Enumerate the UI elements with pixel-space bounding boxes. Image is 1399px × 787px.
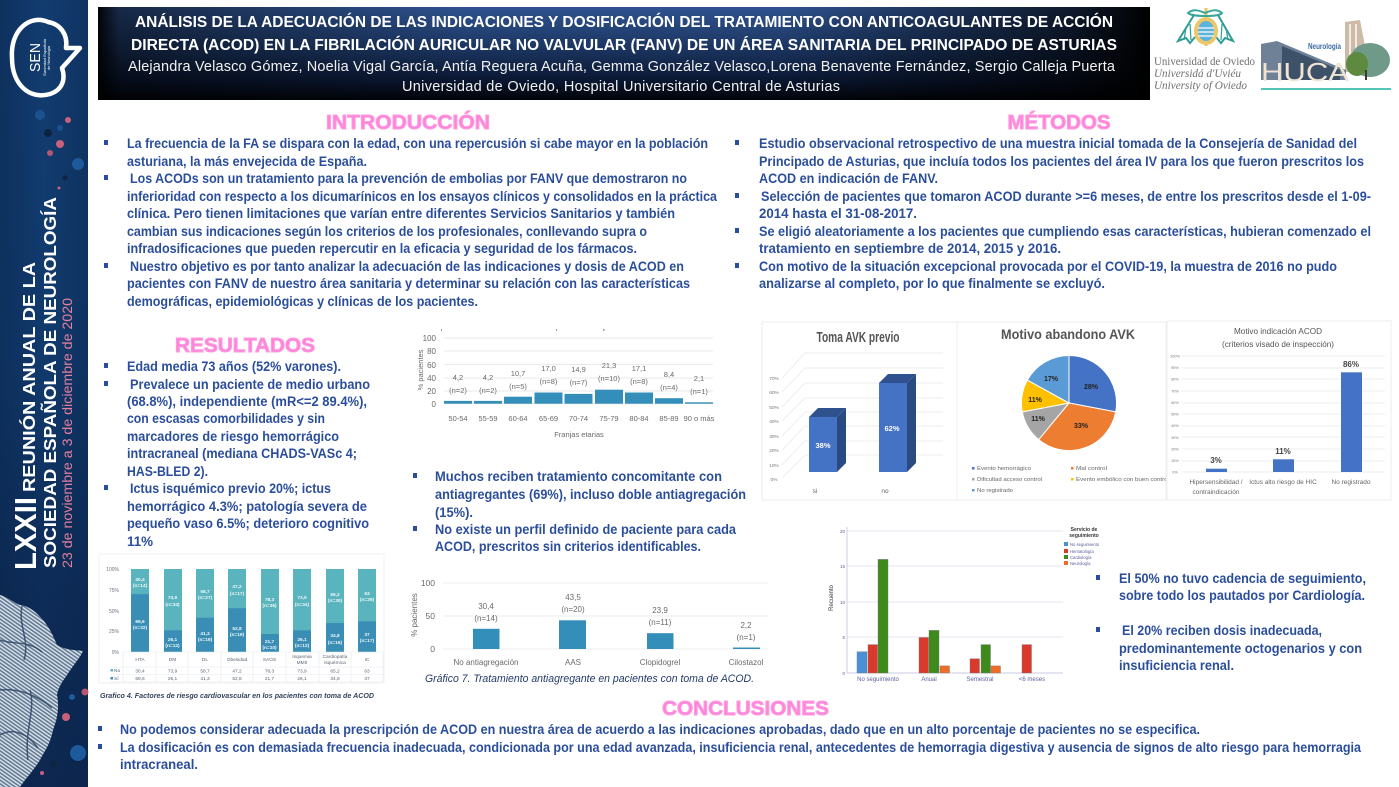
bar value labels: (n=14) bbox=[133, 583, 148, 589]
bar value labels: (n=12) bbox=[295, 643, 310, 649]
logo: HUCA Neurología: HUCA bbox=[1261, 57, 1350, 87]
bar value labels: (n=30) bbox=[328, 598, 343, 604]
sidebar banner bbox=[0, 0, 88, 787]
text block: seguimiento y dosis: predominantemente octogenarios y con bbox=[1119, 641, 1362, 656]
x axis labels: 90 o más bbox=[684, 414, 715, 423]
illustration: brain bbox=[0, 595, 83, 787]
y axis labels: 100% bbox=[106, 567, 120, 573]
value labels bbox=[474, 593, 756, 642]
chart: servicio de seguimiento: 20 bbox=[840, 529, 845, 534]
logo: Universidad de Oviedo: Universidad de Oviedo bbox=[1154, 56, 1255, 68]
sidebar title: LXXII bbox=[8, 497, 43, 570]
chart: toma AVK previo: 0% bbox=[771, 477, 778, 483]
chart: toma AVK previo: 50% bbox=[769, 405, 780, 411]
chart: motivo indicación ACOD: 50% bbox=[1171, 412, 1179, 416]
chart: motivo indicación ACOD: 100% bbox=[1170, 354, 1180, 358]
heading: resultados: RESULTADOS bbox=[175, 335, 315, 357]
bar value labels: 65,2 bbox=[330, 592, 340, 598]
chart: motivo indicación ACOD: 30% bbox=[1171, 436, 1179, 440]
y axis labels: 40 bbox=[427, 374, 437, 383]
text block: resultados: 11% bbox=[127, 534, 153, 549]
value labels: (n=4) bbox=[660, 383, 678, 392]
text block: introducción: inferioridad con respecto a los dicumarínicos en los ensayos clínicos y consolidados en la práctica bbox=[127, 189, 717, 204]
text block: resultados bbox=[104, 359, 370, 549]
chart: motivo abandono AVK: 33% bbox=[1074, 423, 1089, 430]
chart: motivo indicación ACOD: 80% bbox=[1171, 378, 1179, 382]
value labels: 10,7 bbox=[511, 369, 525, 378]
icon: crest bbox=[1178, 8, 1233, 46]
y axis labels bbox=[423, 334, 437, 409]
text block: métodos: 2014 hasta el 31-08-2017. bbox=[759, 206, 917, 221]
bar value labels: 47,2 bbox=[232, 584, 242, 590]
text block: seguimiento y dosis bbox=[1096, 571, 1366, 673]
chart: motivo indicación ACOD: 20% bbox=[1171, 448, 1179, 452]
chart: factores de riesgo cardiovascular bbox=[99, 554, 384, 700]
chart title: (criterios visado de inspección) bbox=[1222, 340, 1334, 349]
data table: HTA bbox=[135, 657, 145, 663]
logo: HUCA Neurología: Neurología bbox=[1308, 41, 1341, 51]
data table bbox=[110, 652, 383, 682]
bar value labels: (n=10) bbox=[262, 645, 277, 651]
chart: motivo indicación ACOD: No registrado bbox=[1331, 479, 1371, 486]
chart: toma AVK previo: si bbox=[813, 488, 817, 495]
panel: conclusiones bbox=[98, 698, 1361, 772]
chart: tratamiento antiagregante: 50 bbox=[426, 611, 435, 621]
value labels: (n=8) bbox=[630, 377, 648, 386]
data table: 69,6 bbox=[135, 676, 145, 682]
chart: motivo indicación ACOD: 60% bbox=[1171, 401, 1179, 405]
data table: 63 bbox=[364, 668, 370, 674]
text block: métodos: Estudio observacional retrospectivo de una muestra inicial tomada de la Consejería de Sanidad del bbox=[759, 136, 1357, 151]
bar value labels: (n=19) bbox=[198, 637, 213, 643]
y axis labels: 0% bbox=[112, 650, 120, 656]
data table: 58,7 bbox=[200, 668, 210, 674]
pie bbox=[1021, 355, 1117, 451]
data table: 34,8 bbox=[330, 676, 340, 682]
chart title: Motivo abandono AVK bbox=[1001, 326, 1135, 342]
text block: seguimiento y dosis: El 20% reciben dosis inadecuada, bbox=[1122, 623, 1322, 638]
text block: antiagregación: No existe un perfil definido de paciente para cada bbox=[435, 522, 736, 537]
value labels: (n=2) bbox=[449, 386, 467, 395]
bar value labels: 73,9 bbox=[297, 595, 307, 601]
value labels: (n=5) bbox=[509, 382, 527, 391]
chart: motivo indicación ACOD: 90% bbox=[1171, 366, 1179, 370]
value labels: (n=20) bbox=[561, 605, 585, 614]
icon: SEN logo bbox=[12, 20, 80, 95]
legend: Neurología bbox=[1070, 561, 1091, 566]
data table: 73,9 bbox=[297, 668, 307, 674]
chart: motivo indicación ACOD: 10% bbox=[1171, 459, 1179, 463]
icon: SEN logo: de Neurología bbox=[47, 46, 51, 70]
3D bars bbox=[809, 374, 916, 472]
chart: franjas etarias bbox=[416, 330, 715, 439]
panel: introducción bbox=[104, 110, 717, 309]
text block: conclusiones bbox=[98, 722, 1361, 772]
text block: introducción bbox=[104, 136, 717, 309]
data table: DM bbox=[169, 657, 176, 663]
y axis labels: 20 bbox=[427, 387, 437, 396]
bars bbox=[473, 620, 760, 649]
chart: motivo indicación ACOD bbox=[1167, 321, 1391, 500]
logo: Universidad de Oviedo: Universidá d'Uviéu bbox=[1154, 68, 1241, 80]
chart: motivo abandono AVK: 17% bbox=[1044, 376, 1059, 383]
chart: toma AVK previo: 20% bbox=[769, 448, 780, 454]
value labels: 8,4 bbox=[664, 370, 674, 379]
logo: Universidad de Oviedo bbox=[1154, 8, 1255, 92]
data table: 21,7 bbox=[265, 676, 274, 682]
text block: seguimiento y dosis: insuficiencia renal. bbox=[1119, 658, 1234, 673]
text block: seguimiento y dosis: sobre todo los pautados por Cardiología. bbox=[1119, 588, 1365, 603]
bar value labels: (n=17) bbox=[230, 591, 245, 597]
x axis labels: 60-64 bbox=[508, 414, 528, 423]
icon: SEN logo: Sociedad Española bbox=[43, 39, 47, 76]
bar value labels: 73,9 bbox=[168, 595, 177, 601]
bar value labels: (n=34) bbox=[295, 602, 310, 608]
chart: motivo abandono AVK: 28% bbox=[1084, 384, 1099, 391]
value labels: 21,3 bbox=[602, 361, 616, 370]
data table: 30,4 bbox=[135, 668, 145, 674]
chart: toma AVK previo: 38% bbox=[815, 441, 831, 450]
text block: resultados: Edad media 73 años (52% varones). bbox=[127, 359, 341, 374]
value labels: (n=1) bbox=[737, 633, 756, 642]
chart: toma AVK previo: 62% bbox=[884, 424, 900, 433]
data table: 73,9 bbox=[168, 668, 177, 674]
legend: Cardiología bbox=[1070, 555, 1092, 560]
value labels: (n=10) bbox=[598, 374, 620, 383]
bar value labels: (n=16) bbox=[328, 640, 343, 646]
y axis labels: 25% bbox=[109, 629, 120, 635]
value labels: 43,5 bbox=[565, 593, 581, 602]
data table: SAOS bbox=[263, 657, 276, 663]
text block: métodos: analizarse al completo, por lo que finalmente se excluyó. bbox=[759, 276, 1105, 291]
chart: servicio de seguimiento: No seguimiento bbox=[857, 677, 900, 683]
chart caption: Gráfico 7. Tratamiento antiagregante en pacientes con toma de ACOD. bbox=[425, 673, 754, 685]
chart: motivo indicación ACOD: 11% bbox=[1275, 447, 1291, 456]
text block: introducción: Los ACODs son un tratamiento para la prevención de embolias por FANV que demostraron no bbox=[130, 171, 687, 186]
chart: tratamiento antiagregante bbox=[410, 578, 768, 685]
value labels: (n=2) bbox=[479, 386, 497, 395]
text block: métodos: Selección de pacientes que tomaron ACOD durante >=6 meses, de entre los prescritos desde el 1-09- bbox=[761, 189, 1371, 204]
chart: motivo indicación ACOD: Ictus alto riesgo de HIC bbox=[1249, 479, 1317, 486]
x axis labels: 75-79 bbox=[599, 414, 619, 423]
bar value labels: 52,8 bbox=[232, 626, 242, 632]
y axis labels: 60 bbox=[427, 361, 437, 370]
data table: Sí bbox=[114, 676, 119, 682]
bar value labels: 41,3 bbox=[200, 631, 210, 637]
text block: introducción: cambian sus indicaciones según los criterios de los profesionales, conllevando supra o bbox=[127, 224, 647, 239]
text block: resultados: pequeño vaso 6.5%; deterioro cognitivo bbox=[127, 516, 369, 531]
y axis labels: 100 bbox=[423, 334, 437, 343]
header banner bbox=[98, 7, 1150, 100]
value labels: (n=8) bbox=[540, 377, 558, 386]
value labels: 30,4 bbox=[478, 602, 494, 611]
sidebar title: REUNIÓN ANUAL DE LA bbox=[18, 262, 39, 492]
legend: No registrado bbox=[977, 488, 1013, 494]
value labels: 2,2 bbox=[740, 621, 752, 630]
data table: 26,1 bbox=[168, 676, 177, 682]
text block: introducción: clínica. Pero tienen limitaciones que varían entre diferentes Servicios Sanitarios y también bbox=[127, 206, 675, 221]
chart: servicio de seguimiento: 15 bbox=[840, 564, 845, 569]
sidebar title: SOCIEDAD ESPAÑOLA DE NEUROLOGÍA bbox=[39, 197, 60, 568]
legend: No seguimiento bbox=[1070, 542, 1100, 547]
bar value labels: 26,1 bbox=[297, 637, 307, 643]
chart: toma AVK previo: 30% bbox=[769, 434, 780, 440]
text block: conclusiones: intracraneal. bbox=[120, 757, 198, 772]
value labels: (n=11) bbox=[649, 618, 672, 627]
legend: Servicio de bbox=[1071, 527, 1098, 533]
y axis labels: 0 bbox=[432, 400, 437, 409]
x axis labels bbox=[448, 414, 715, 423]
value labels: 2,1 bbox=[694, 374, 704, 383]
bars bbox=[1206, 372, 1362, 472]
value labels: 23,9 bbox=[652, 606, 668, 615]
chart: motivo abandono AVK bbox=[957, 322, 1169, 500]
text block: conclusiones: No podemos considerar adecuada la prescripción de ACOD en nuestra área de acuerdo a las indicaciones aprobadas, dado que en un alto porcentaje de pacientes no se especifica. bbox=[120, 722, 1200, 737]
panel: resultados bbox=[104, 335, 370, 549]
bar value labels: (n=32) bbox=[133, 625, 148, 631]
bar value labels: 69,6 bbox=[135, 619, 145, 625]
text block: introducción: Nuestro objetivo es por tanto analizar la adecuación de las indicaciones y dosis de ACOD en bbox=[130, 259, 684, 274]
data table: MMII bbox=[297, 660, 307, 666]
text block: resultados: Prevalece un paciente de medio urbano bbox=[130, 377, 370, 392]
value labels: (n=14) bbox=[474, 614, 498, 623]
bar value labels: 58,7 bbox=[200, 589, 210, 595]
chart: motivo abandono AVK: 11% bbox=[1028, 397, 1043, 404]
x axis labels: AAS bbox=[565, 658, 581, 667]
data table: 41,3 bbox=[200, 676, 210, 682]
bar value labels: (n=12) bbox=[165, 643, 180, 649]
data table: Cardiopatía bbox=[323, 654, 348, 660]
bar value labels: 63 bbox=[364, 591, 370, 597]
value labels bbox=[449, 361, 708, 396]
x axis labels: 50-54 bbox=[448, 414, 468, 423]
x axis labels: 85-89 bbox=[659, 414, 679, 423]
data table: No bbox=[114, 668, 120, 674]
text block: métodos: ACOD en indicación de FANV. bbox=[759, 171, 938, 186]
legend: Dificultad acceso control bbox=[977, 477, 1042, 483]
data table: isquémica bbox=[324, 660, 346, 666]
x axis labels bbox=[454, 658, 764, 667]
heading: métodos: MÉTODOS bbox=[1008, 111, 1110, 134]
text block: antiagregación: Muchos reciben tratamiento concomitante con bbox=[435, 469, 722, 484]
text block: introducción: asturiana, la más envejecida de España. bbox=[127, 154, 367, 169]
chart: motivo indicación ACOD: contraindicación bbox=[1193, 489, 1240, 496]
heading: conclusiones: CONCLUSIONES bbox=[662, 698, 829, 720]
sidebar title: 23 de noviembre a 3 de diciembre de 2020 bbox=[60, 298, 75, 568]
bar value labels: (n=19) bbox=[230, 632, 245, 638]
chart: toma AVK previo: 70% bbox=[769, 376, 780, 382]
legend: seguimiento bbox=[1069, 533, 1099, 539]
chart: motivo indicación ACOD: 3% bbox=[1210, 456, 1222, 465]
text block: introducción: La frecuencia de la FA se dispara con la edad, con una repercusión si cabe mayor en la población bbox=[127, 136, 708, 151]
y axis labels: 50% bbox=[109, 609, 120, 615]
chart: servicio de seguimiento: 5 bbox=[842, 635, 845, 640]
x axis labels: Cilostazol bbox=[729, 658, 764, 667]
panel: métodos bbox=[735, 111, 1371, 291]
value labels: 17,0 bbox=[541, 364, 556, 373]
x axis labels: 65-69 bbox=[539, 414, 558, 423]
data table: 26,1 bbox=[297, 676, 307, 682]
bar value labels: (n=34) bbox=[165, 602, 180, 608]
chart title: Toma AVK previo bbox=[816, 330, 900, 346]
chart: toma AVK previo: 40% bbox=[769, 419, 780, 425]
chart: servicio de seguimiento: Semestral bbox=[966, 677, 994, 683]
x axis labels: 80-84 bbox=[629, 414, 649, 423]
text block: resultados: Ictus isquémico previo 20%; ictus bbox=[130, 481, 331, 496]
value labels: 4,2 bbox=[483, 373, 493, 382]
text block: métodos: Se eligió aleatoriamente a los pacientes que cumpliendo esas características, hubieran comenzado el bbox=[759, 224, 1371, 239]
y axis labels: 75% bbox=[109, 588, 120, 594]
chart: tratamiento antiagregante: 100 bbox=[421, 578, 435, 588]
legend: Mal control bbox=[1076, 466, 1107, 472]
data table: Obesidad bbox=[227, 657, 248, 663]
bar value labels: (n=17) bbox=[360, 638, 375, 644]
authors: Universidad de Oviedo, Hospital Universitario Central de Asturias bbox=[402, 79, 840, 95]
decorative dots bbox=[35, 110, 88, 775]
bar value labels: 30,4 bbox=[135, 577, 145, 583]
bars bbox=[857, 559, 1032, 673]
data table: 52,8 bbox=[232, 676, 242, 682]
sidebar title bbox=[8, 197, 75, 570]
stacked bars bbox=[131, 569, 376, 652]
data table: 47,2 bbox=[232, 668, 242, 674]
bar value labels: 37 bbox=[364, 632, 370, 638]
text block: métodos: Con motivo de la situación excepcional provocada por el COVID-19, la muestra de 2016 no pudo bbox=[759, 259, 1337, 274]
bar value labels: (n=29) bbox=[360, 597, 375, 603]
chart: franjas etarias: Franjas etarias bbox=[554, 430, 604, 439]
chart: servicio de seguimiento: Anual bbox=[921, 677, 937, 683]
heading: introducción: INTRODUCCIÓN bbox=[326, 110, 490, 134]
value labels: 4,2 bbox=[453, 373, 463, 382]
value labels: (n=7) bbox=[570, 378, 588, 387]
authors: Alejandra Velasco Gómez, Noelia Vigal García, Antía Reguera Acuña, Gemma González Velasco,Lorena Benavente Fernández, Sergio Calleja Puerta bbox=[128, 59, 1116, 75]
text block: métodos bbox=[735, 136, 1371, 291]
text block: introducción: infradosificaciones que pueden repercutir en la eficacia y seguridad de los fármacos. bbox=[127, 241, 637, 256]
icon: SEN logo: SEN bbox=[27, 43, 44, 72]
text block: resultados: intracraneal (mediana CHADS-VASc 4; bbox=[127, 446, 357, 461]
chart: servicio de seguimiento: 0 bbox=[842, 671, 845, 676]
text block: introducción: demográficas, epidemiológicas y clínicas de los pacientes. bbox=[127, 294, 478, 309]
illustration: building bbox=[1261, 20, 1390, 80]
authors bbox=[128, 59, 1116, 95]
chart: tratamiento antiagregante: 0 bbox=[430, 644, 435, 654]
bar value labels bbox=[133, 577, 375, 651]
legend bbox=[972, 466, 1169, 494]
x axis labels: 70-74 bbox=[569, 414, 588, 423]
text block: introducción: pacientes con FANV de nuestro área sanitaria y determinar su relación con las características bbox=[127, 276, 690, 291]
legend bbox=[1064, 527, 1100, 566]
bar value labels: (n=27) bbox=[198, 595, 213, 601]
legend: Hematología bbox=[1070, 549, 1094, 554]
chart: toma AVK previo: 10% bbox=[769, 463, 780, 469]
logo: Universidad de Oviedo: University of Oviedo bbox=[1154, 80, 1247, 92]
chart: tratamiento antiagregante: % pacientes bbox=[410, 593, 419, 637]
bars bbox=[444, 390, 713, 404]
title: DIRECTA (ACOD) EN LA FIBRILACIÓN AURICULAR NO VALVULAR (FANV) DE UN ÁREA SANITARIA DEL PRINCIPADO DE ASTURIAS bbox=[131, 36, 1117, 54]
text block: resultados: con escasas comorbilidades y sin bbox=[127, 411, 325, 426]
title bbox=[131, 13, 1117, 54]
chart: servicio de seguimiento: <6 meses bbox=[1019, 677, 1045, 683]
chart: toma AVK previo: no bbox=[881, 488, 889, 495]
text block: métodos: Principado de Asturias, que incluía todos los pacientes del área IV para los que fueron prescritos los bbox=[759, 154, 1364, 169]
chart: motivo indicación ACOD: 40% bbox=[1171, 424, 1179, 428]
data table: Isquemia bbox=[292, 654, 312, 660]
bar value labels: 78,3 bbox=[265, 597, 274, 603]
y axis labels: 80 bbox=[427, 347, 437, 356]
data table: 65,2 bbox=[330, 668, 340, 674]
text block: antiagregación: (15%). bbox=[435, 505, 473, 520]
chart: franjas etarias: % pacientes bbox=[416, 349, 425, 390]
text block: resultados: HAS-BLED 2). bbox=[127, 464, 208, 479]
text block: seguimiento y dosis: El 50% no tuvo cadencia de seguimiento, bbox=[1119, 571, 1366, 586]
chart: motivo indicación ACOD: 86% bbox=[1343, 360, 1359, 369]
text block: antiagregación bbox=[413, 469, 746, 554]
chart: servicio de seguimiento bbox=[829, 527, 1100, 683]
chart caption: Grafico 4. Factores de riesgo cardiovascular en los pacientes con toma de ACOD bbox=[100, 691, 375, 700]
data table: 37 bbox=[364, 676, 370, 682]
data table: DL bbox=[202, 657, 208, 663]
bar value labels: (n=36) bbox=[262, 603, 277, 609]
text block: resultados: marcadores de riesgo hemorrágico bbox=[127, 429, 339, 444]
chart: motivo indicación ACOD: 70% bbox=[1171, 390, 1179, 394]
chart: motivo abandono AVK: 11% bbox=[1031, 416, 1046, 423]
chart: toma AVK previo: 60% bbox=[769, 390, 780, 396]
bar value labels: 34,8 bbox=[330, 633, 340, 639]
value labels: (n=1) bbox=[690, 387, 708, 396]
x axis labels: 55-59 bbox=[478, 414, 498, 423]
chart title bbox=[1222, 327, 1334, 349]
text block: métodos: tratamiento en septiembre de 2014, 2015 y 2016. bbox=[759, 241, 1061, 256]
chart: motivo indicación ACOD: 0% bbox=[1172, 470, 1178, 474]
chart: toma AVK previo bbox=[762, 322, 957, 500]
text block: resultados: (68.8%), independiente (mR<=2 89.4%), bbox=[127, 394, 367, 409]
legend: Evento hemorrágico bbox=[977, 466, 1031, 472]
data table: IC bbox=[365, 657, 370, 663]
chart title: Motivo indicación ACOD bbox=[1234, 327, 1322, 336]
bar value labels: 21,7 bbox=[265, 639, 274, 645]
logo: HUCA Neurología bbox=[1261, 20, 1391, 90]
chart: servicio de seguimiento: Recuento bbox=[829, 584, 835, 611]
text block: resultados: hemorrágico 4.3%; patología severa de bbox=[127, 499, 367, 514]
x axis labels: No antiagregación bbox=[454, 658, 518, 667]
chart: servicio de seguimiento: 10 bbox=[840, 600, 845, 605]
chart: motivo indicación ACOD: Hipersensibilidad / bbox=[1189, 479, 1243, 486]
data table: 78,3 bbox=[265, 668, 274, 674]
text block: antiagregación: ACOD, prescritos sin criterios identificables. bbox=[435, 539, 701, 554]
legend: Evento embólico con buen control bbox=[1076, 477, 1169, 483]
y axis labels bbox=[106, 567, 120, 656]
bar value labels: 26,1 bbox=[168, 637, 177, 643]
value labels: 14,9 bbox=[571, 365, 586, 374]
title: ANÁLISIS DE LA ADECUACIÓN DE LAS INDICACIONES Y DOSIFICACIÓN DEL TRATAMIENTO CON ANTICOAGULANTES DE ACCIÓN bbox=[135, 13, 1113, 31]
value labels: 17,1 bbox=[632, 364, 646, 373]
text block: antiagregación: antiagregantes (69%), incluso doble antiagregación bbox=[435, 487, 746, 502]
x axis labels: Clopidogrel bbox=[640, 658, 680, 667]
